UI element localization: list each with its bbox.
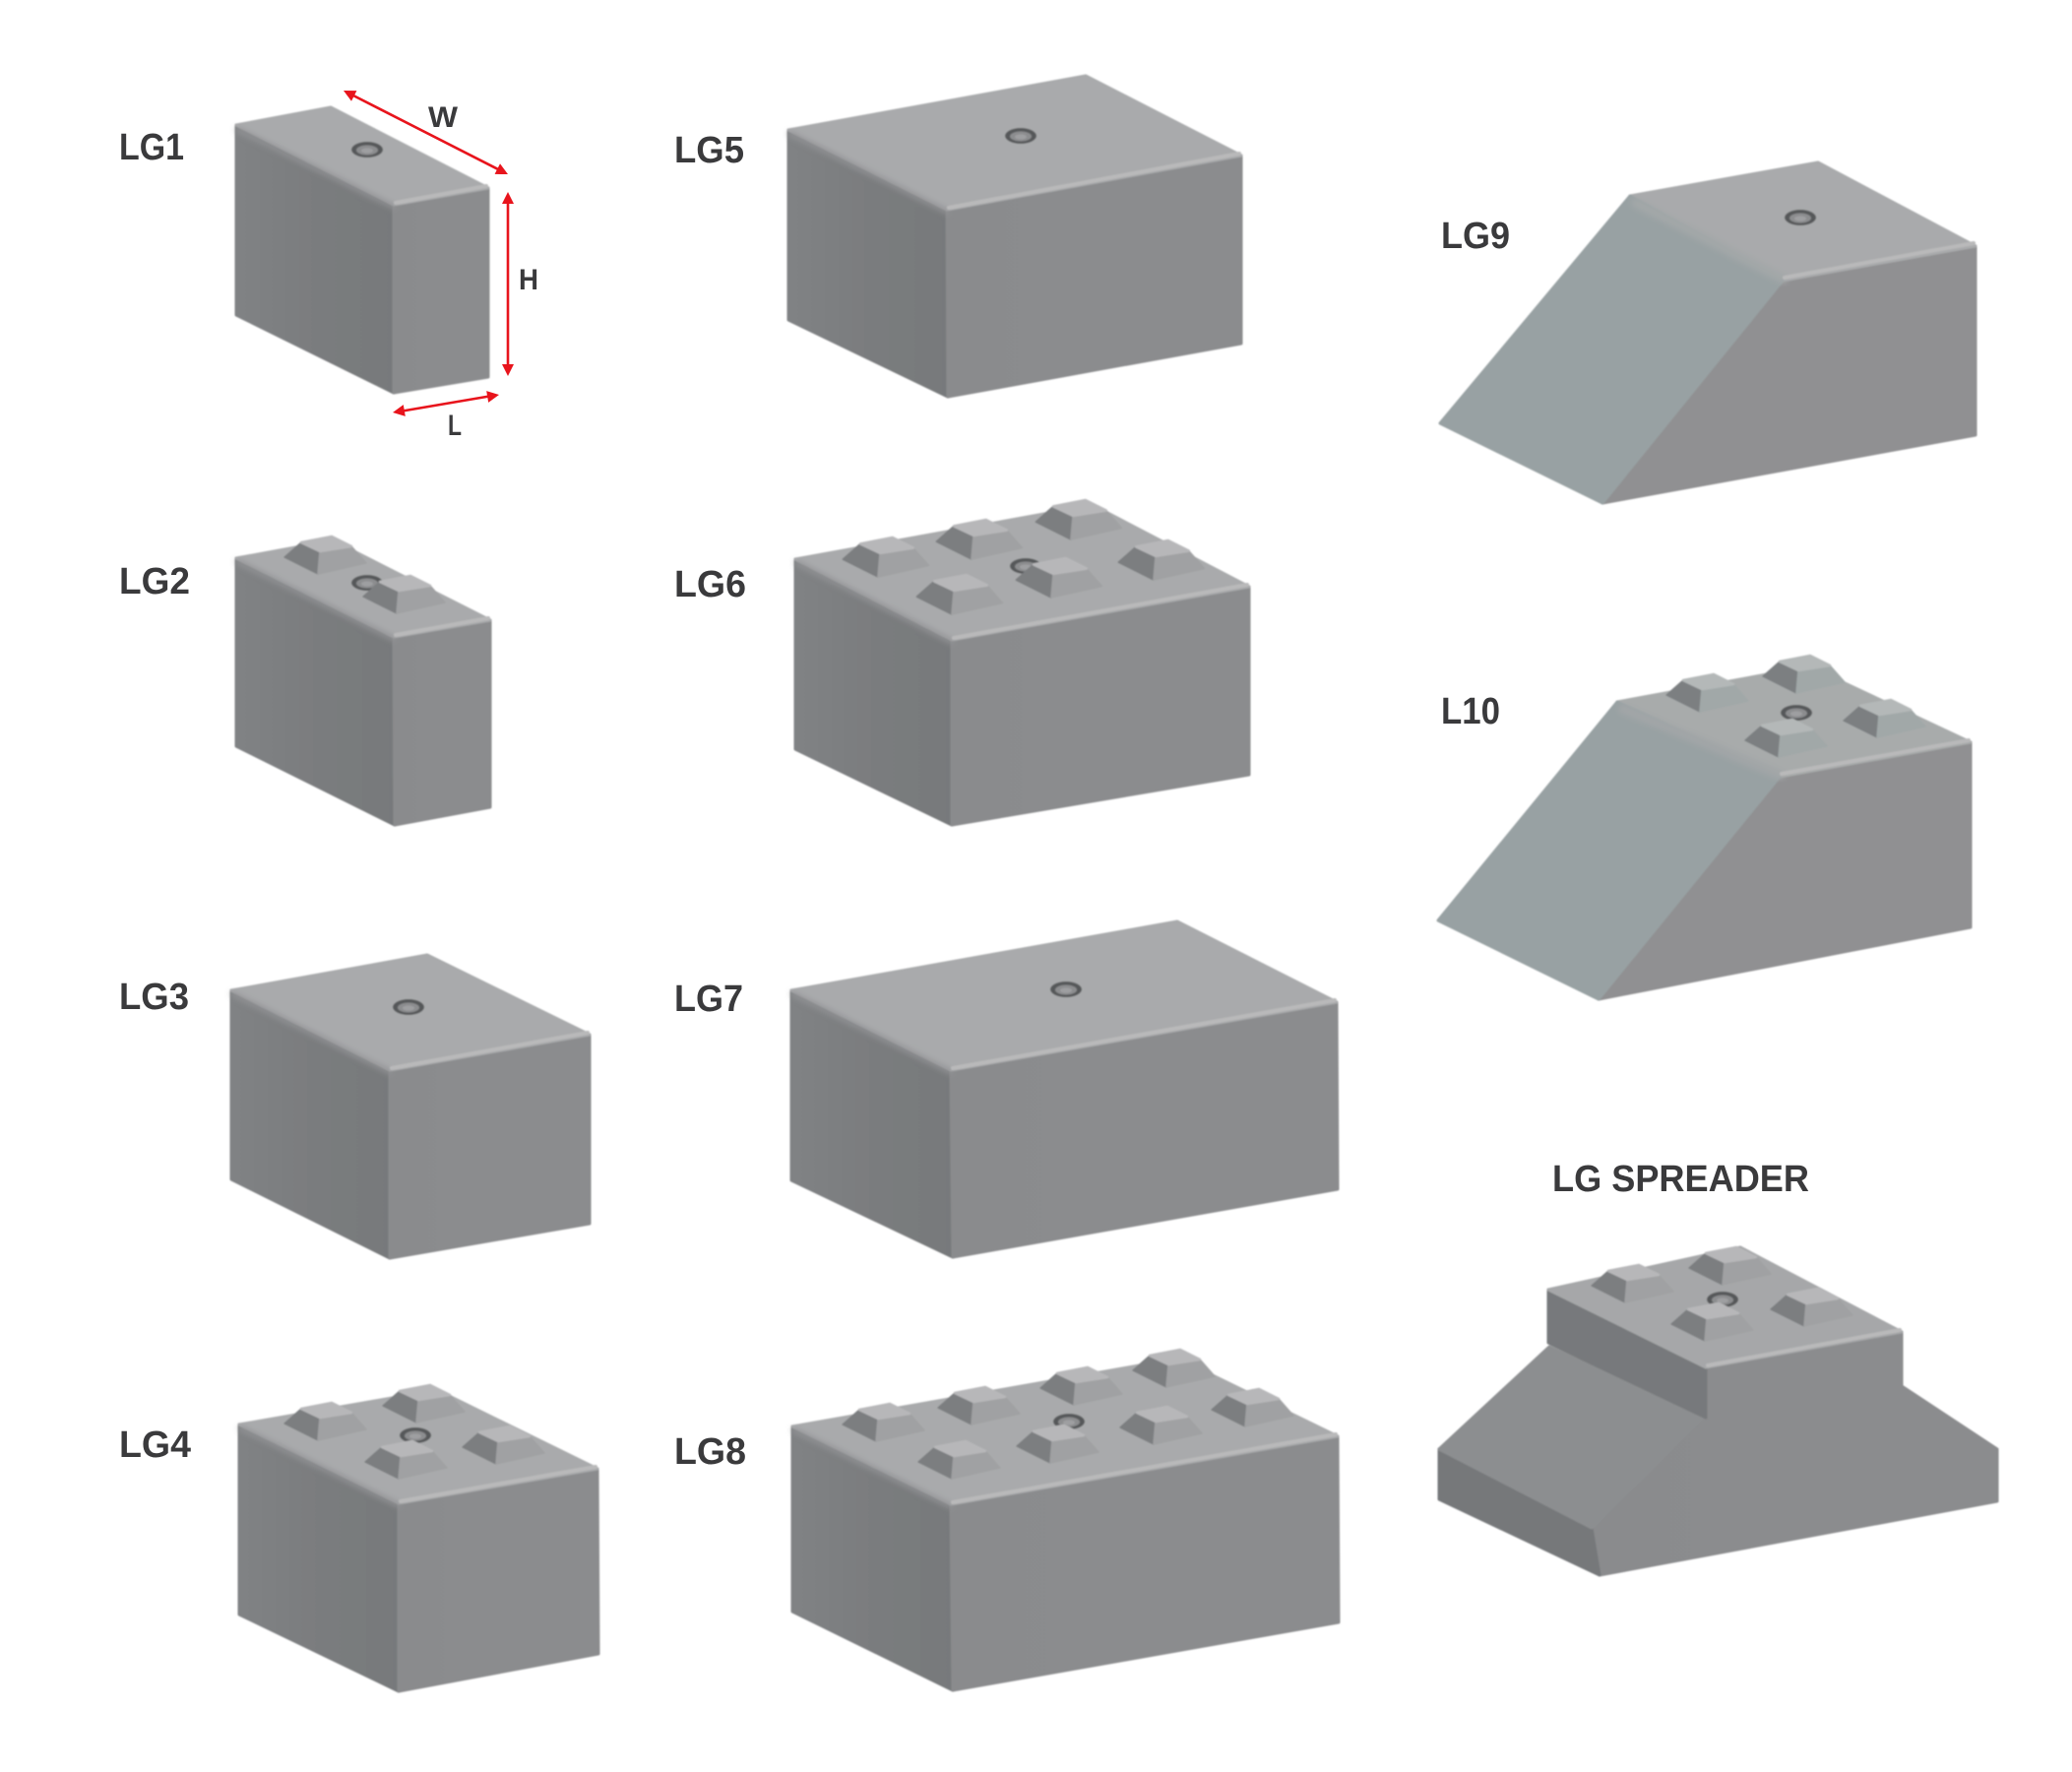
panel: LG7 [674, 921, 1338, 1257]
label: LG9: LG9 [1441, 216, 1510, 257]
hole: LG9 [1785, 210, 1816, 225]
label: LG5: LG5 [674, 130, 744, 171]
studs: LG4 [284, 1385, 544, 1479]
arrow: L dimension [393, 391, 499, 416]
arrow: W dimension [344, 91, 508, 174]
panel: LG2 [119, 537, 490, 825]
hole: LG8 [1053, 1414, 1085, 1429]
panel: LG6 [674, 500, 1249, 825]
block: LG4 [239, 1385, 598, 1691]
hole: LG7 [1050, 981, 1082, 997]
label: LG8: LG8 [674, 1431, 746, 1473]
label: LG3: LG3 [119, 977, 189, 1018]
studs: L10 [1666, 656, 1925, 757]
panel: LG1 [119, 91, 538, 442]
studs: LG SPREADER [1592, 1247, 1852, 1341]
block: LG3 [231, 955, 590, 1258]
block: LG1 [236, 107, 488, 393]
hole: LG SPREADER [1707, 1292, 1738, 1307]
panel: LG3 [119, 955, 590, 1258]
hole: LG4 [400, 1427, 431, 1443]
label: LG4: LG4 [119, 1424, 191, 1466]
panel: LG5 [674, 76, 1241, 397]
hole: LG6 [1010, 558, 1041, 574]
block: LG6 [795, 500, 1249, 825]
panel: L10 [1438, 656, 1971, 999]
panel: LG SPREADER [1439, 1159, 1997, 1575]
label: LG6: LG6 [674, 564, 746, 605]
block: LG5 [788, 76, 1241, 397]
hole: LG5 [1005, 128, 1036, 144]
label: L10: L10 [1441, 691, 1500, 732]
label: LG7: LG7 [674, 979, 743, 1020]
block: L10 [1438, 656, 1971, 999]
arrow: H dimension [502, 192, 514, 376]
hole: L10 [1781, 705, 1812, 721]
hole: LG1 [351, 142, 383, 158]
label: LG1: LG1 [119, 127, 184, 168]
label: LG2: LG2 [119, 561, 190, 602]
hole: LG3 [393, 999, 424, 1015]
studs: LG8 [843, 1350, 1293, 1479]
block: LG8 [792, 1350, 1339, 1690]
block: LG9 [1440, 162, 1976, 503]
studs: LG6 [843, 500, 1204, 614]
label: LG SPREADER: LG SPREADER [1552, 1159, 1809, 1200]
block: LG SPREADER [1439, 1247, 1997, 1575]
label: W: W [428, 101, 459, 134]
label: H: H [519, 264, 538, 296]
block: LG2 [236, 537, 490, 825]
label: L: L [448, 410, 462, 442]
studs: LG2 [284, 537, 445, 613]
panel: LG8 [674, 1350, 1339, 1690]
block: LG7 [791, 921, 1338, 1257]
panel: LG4 [119, 1385, 598, 1691]
panel: LG9 [1440, 162, 1976, 503]
hole: LG2 [351, 575, 383, 591]
